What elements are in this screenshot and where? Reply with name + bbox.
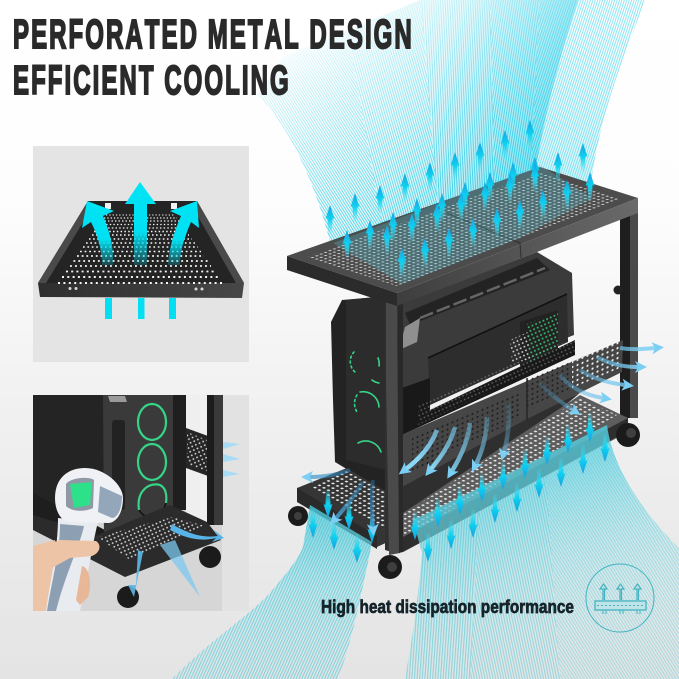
airflow: exhaust below tray, right bbox=[405, 425, 679, 679]
product: PC stand with tower case bbox=[297, 204, 638, 555]
panel: perforated tray close-up bbox=[33, 146, 249, 362]
title line 1: PERFORATED METAL DESIGN bbox=[13, 13, 414, 58]
front holes bbox=[68, 287, 204, 290]
title bbox=[13, 13, 414, 104]
airflow over shelf bbox=[333, 165, 592, 284]
bottom tray bbox=[297, 395, 628, 552]
caption: High heat dissipation performance bbox=[321, 597, 574, 617]
cyan inflow stubs bbox=[105, 298, 176, 319]
title line 2: EFFICIENT COOLING bbox=[13, 59, 291, 104]
tray body bbox=[38, 201, 244, 298]
hand: palm bbox=[33, 540, 56, 611]
cyan arrows through tray bbox=[82, 182, 199, 265]
panel: infrared thermometer photo bbox=[33, 395, 249, 611]
thermometer bbox=[46, 468, 123, 611]
icon plate bbox=[595, 601, 646, 614]
icon: heat dissipation bbox=[586, 564, 654, 632]
back of case bbox=[33, 395, 105, 505]
airflow: rising from top shelf bbox=[257, 0, 644, 241]
lower perforated rail bbox=[401, 340, 623, 487]
front leg bbox=[385, 293, 403, 555]
right rear leg bbox=[614, 204, 638, 418]
curved arrows at the case foot bbox=[310, 470, 373, 527]
casters bbox=[117, 546, 221, 608]
case with fans bbox=[103, 395, 186, 541]
white gap and side mesh bbox=[186, 395, 207, 522]
right leg bbox=[207, 395, 223, 525]
pale blue arrows bbox=[128, 442, 240, 597]
tray bbox=[33, 505, 221, 577]
icon arrows bbox=[600, 584, 641, 600]
curved arrows through the perforated rail, right group bbox=[540, 348, 655, 410]
blue down arrows under tray bbox=[308, 413, 610, 563]
tower case: side with fans bbox=[331, 296, 398, 500]
curved arrows through the perforated rail, left group bbox=[406, 403, 509, 471]
airflow: exhaust below tray, left bbox=[172, 505, 372, 679]
hand: thumb and fingers bbox=[53, 540, 100, 605]
casters bbox=[288, 423, 640, 579]
lower interior bbox=[401, 393, 580, 520]
blue up arrows on top shelf bbox=[326, 120, 594, 277]
tray perforation rows bbox=[58, 215, 223, 283]
top shelf bbox=[287, 167, 638, 306]
tower case: top and front bbox=[398, 252, 575, 435]
